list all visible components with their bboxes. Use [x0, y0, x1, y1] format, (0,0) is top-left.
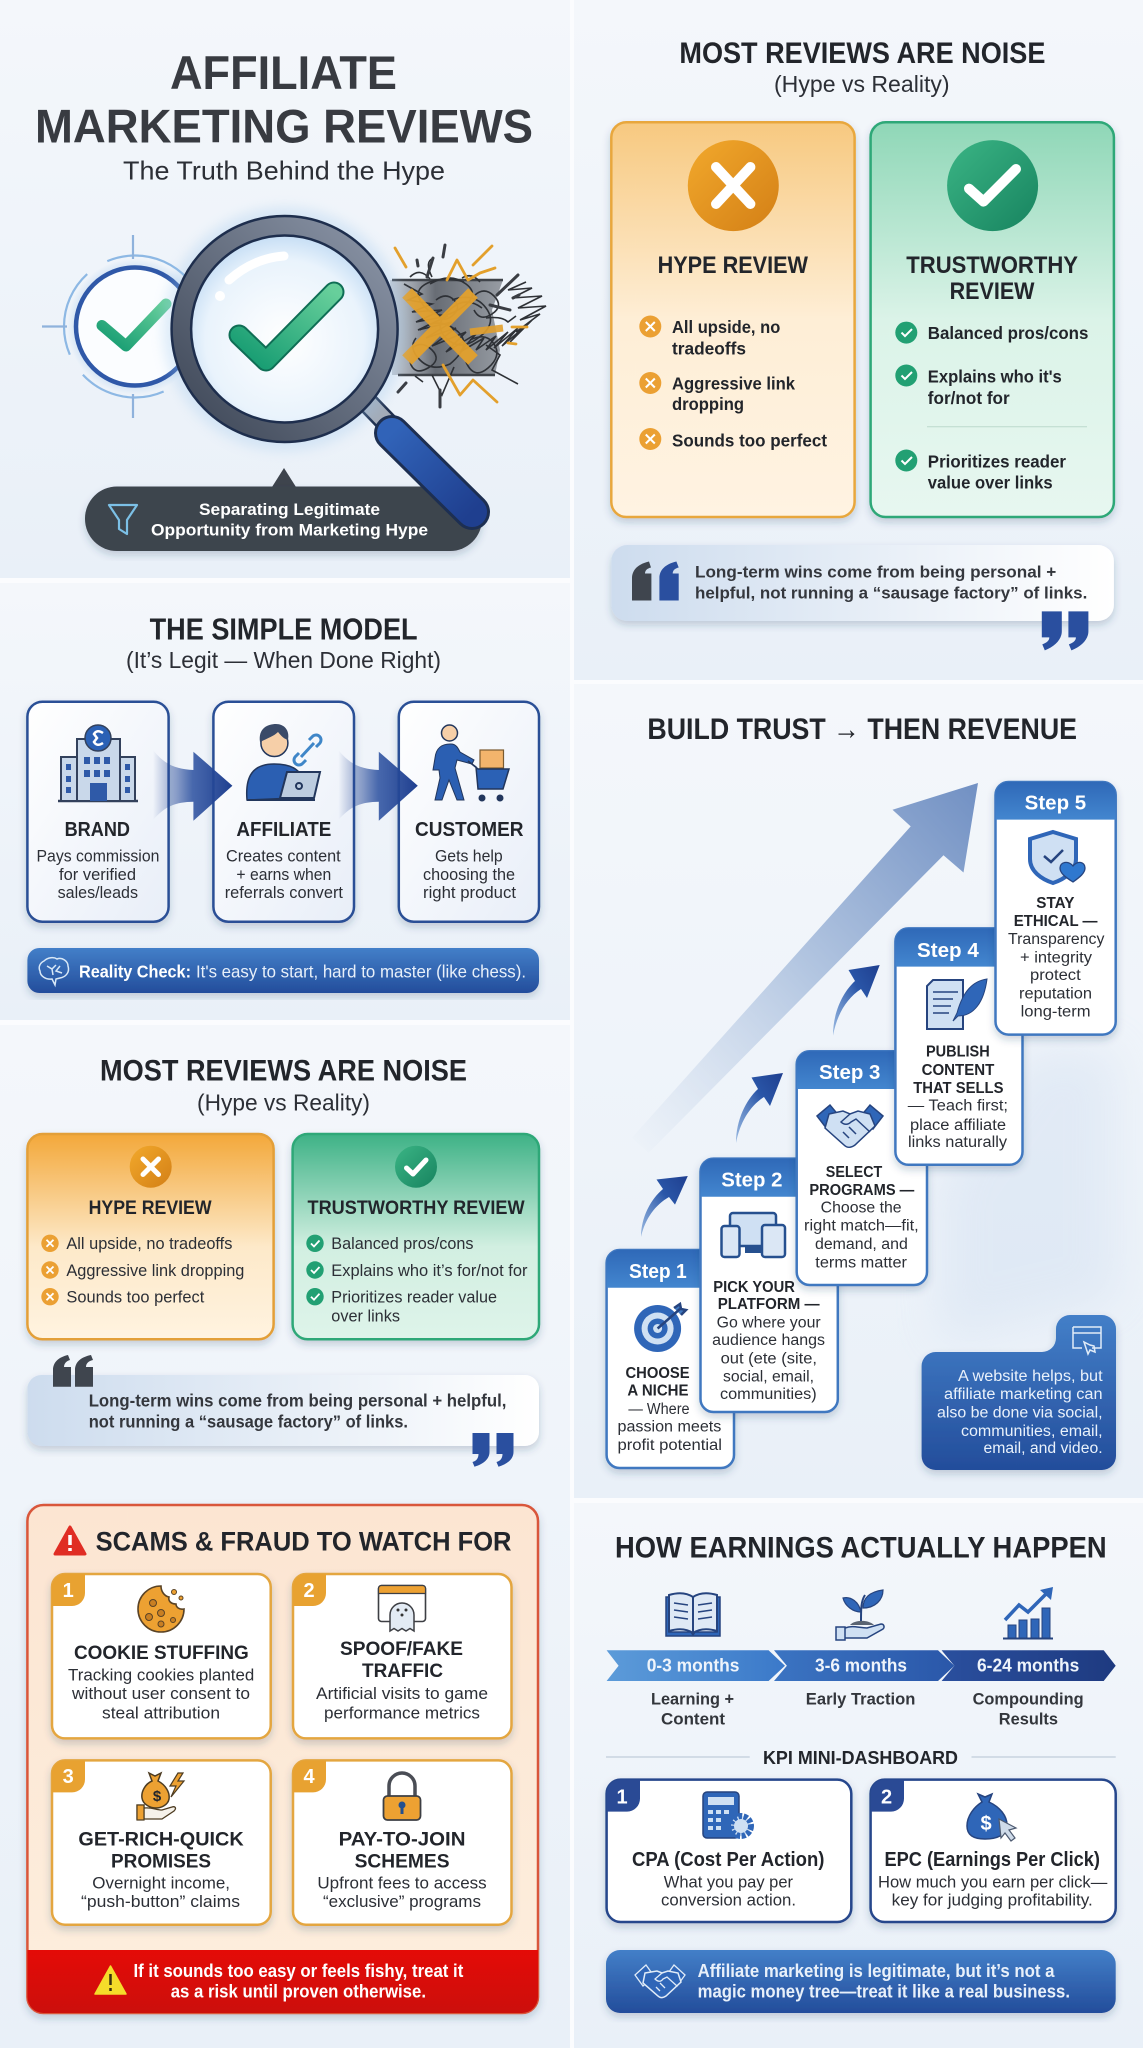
- badge: 1: 1: [616, 1786, 628, 1808]
- step text: place affiliate: [910, 1117, 1006, 1134]
- badge: 1: [52, 1574, 85, 1606]
- subheading: (Hype vs Reality): [197, 1090, 370, 1116]
- label: SCHEMES: [355, 1851, 450, 1873]
- quote text: helpful, not running a “sausage factory” of links.: [695, 583, 1087, 602]
- description: [878, 1873, 1108, 1909]
- step text: THAT SELLS: [913, 1080, 1004, 1097]
- badge: 2: 2: [881, 1786, 892, 1808]
- card: hype review: [611, 122, 855, 517]
- icon: x badge: [130, 1146, 172, 1188]
- card: affiliate: [213, 702, 354, 922]
- step text: SELECT: [826, 1164, 883, 1181]
- description: [68, 1667, 254, 1722]
- description: [661, 1873, 796, 1909]
- timeline captions: Early Traction: [806, 1690, 915, 1708]
- card: pay to join: [293, 1760, 512, 1925]
- description: How much you earn per click—: [878, 1873, 1108, 1891]
- description: sales/leads: [58, 884, 138, 902]
- step text: [712, 1279, 825, 1403]
- label: CPA (Cost Per Action): [632, 1849, 824, 1871]
- icon: growth chart: [1003, 1587, 1053, 1638]
- label: GET-RICH-QUICK: [78, 1828, 244, 1850]
- title: MARKETING REVIEWS: [35, 99, 533, 152]
- icon: money bag and cursor: $: [980, 1813, 992, 1835]
- note text: communities, email,: [961, 1423, 1103, 1440]
- arrow: affiliate to customer: [338, 750, 418, 821]
- chevron: 6-24 months: 6-24 months: [977, 1655, 1079, 1675]
- icon: check badge: [395, 1146, 437, 1188]
- icon: open book: [666, 1593, 720, 1636]
- bullet list: Sounds too perfect: [672, 431, 827, 451]
- arrow: brand to affiliate: [153, 750, 232, 821]
- card: CPA: [607, 1780, 851, 1922]
- panel: build trust then revenue: [574, 684, 1143, 1498]
- description: choosing the: [423, 866, 515, 884]
- bullet list: dropping: [672, 394, 744, 414]
- heading: HOW EARNINGS ACTUALLY HAPPEN: [615, 1532, 1107, 1565]
- bullet list: tradeoffs: [672, 338, 746, 358]
- heading: MOST REVIEWS ARE NOISE: [679, 37, 1045, 70]
- step 5 card: [996, 782, 1116, 1035]
- step text: — Teach first;: [908, 1097, 1008, 1114]
- chevron: 0-3 months: [607, 1650, 785, 1681]
- description: [225, 848, 343, 902]
- bullet list: [41, 1235, 244, 1307]
- quote text: [89, 1391, 506, 1431]
- timeline captions: Content: [661, 1709, 725, 1728]
- description: [317, 1875, 487, 1911]
- heading: SCAMS & FRAUD TO WATCH FOR: [96, 1527, 511, 1557]
- step text: profit potential: [618, 1437, 722, 1454]
- label: COOKIE STUFFING: [74, 1642, 249, 1664]
- icon: person with laptop and link: [247, 724, 321, 800]
- label: REVIEW: [950, 278, 1035, 305]
- bullet list: [306, 1235, 528, 1326]
- card: brand: [27, 702, 169, 922]
- label: [339, 1828, 466, 1873]
- bullet list: Prioritizes reader value: [331, 1289, 497, 1307]
- icon: devices: [722, 1213, 785, 1257]
- bullet list: Aggressive link: [672, 373, 795, 393]
- step text: CHOOSE: [626, 1365, 690, 1382]
- step text: reputation: [1019, 986, 1092, 1002]
- label: PAY-TO-JOIN: [339, 1828, 466, 1850]
- bullet list: [895, 322, 1089, 493]
- badge: 2: [871, 1780, 904, 1812]
- callout: reality check: [27, 948, 539, 993]
- icon: funnel: [109, 505, 137, 534]
- label: HYPE REVIEW: [89, 1197, 212, 1219]
- badge: 1: [607, 1780, 640, 1812]
- icon: customer with cart: [433, 725, 509, 802]
- arrow: step 1 to 2: [641, 1176, 688, 1237]
- step text: social, email,: [723, 1368, 814, 1385]
- subheading: (Hype vs Reality): [774, 71, 950, 97]
- step text: [1008, 895, 1105, 1020]
- card: hype review: [27, 1134, 274, 1339]
- icon: handshake: [817, 1105, 883, 1147]
- icon: calculator and gear: [703, 1792, 751, 1838]
- badge: 1: 1: [63, 1580, 74, 1602]
- description: Upfront fees to access: [317, 1875, 487, 1893]
- description: right product: [423, 884, 516, 902]
- description: referrals convert: [225, 884, 343, 902]
- callout: quote: [611, 545, 1114, 650]
- step text: — Where: [628, 1401, 690, 1418]
- panel: how earnings actually happen: [574, 1503, 1143, 2048]
- step text: long-term: [1021, 1003, 1091, 1020]
- text: Reality Check:: [79, 962, 191, 982]
- footer warning: If it sounds too easy or feels fishy, treat it: [134, 1961, 463, 1981]
- callout: separating legitimate opportunity: Separating Legitimate: [199, 500, 380, 519]
- note text: affiliate marketing can: [944, 1386, 1103, 1403]
- bullet list: value over links: [928, 473, 1053, 493]
- callout: quote: [27, 1355, 539, 1467]
- subtitle: The Truth Behind the Hype: [123, 155, 445, 185]
- description: + earns when: [236, 866, 331, 884]
- arrow: big rising arrow: [632, 783, 978, 1153]
- description: Artificial visits to game: [316, 1685, 488, 1703]
- card: spoof fake traffic: [293, 1574, 512, 1738]
- badge: 3: [52, 1760, 85, 1792]
- timeline chevrons: [607, 1650, 1116, 1681]
- step label: Step 5: [1025, 793, 1086, 815]
- step text: [908, 1044, 1008, 1151]
- label: BRAND: [65, 819, 130, 841]
- icon: document and quill: [927, 979, 987, 1029]
- icon: sprout in hand: [836, 1590, 884, 1640]
- quote text: [695, 563, 1087, 602]
- icon: scribble noise with orange X: [390, 245, 546, 407]
- description: for verified: [59, 866, 136, 884]
- timeline captions: [651, 1690, 1084, 1728]
- description: [36, 848, 159, 902]
- description: Tracking cookies planted: [68, 1667, 254, 1685]
- badge: 2: [293, 1574, 326, 1606]
- step text: PUBLISH: [926, 1044, 990, 1061]
- step text: demand, and: [815, 1236, 908, 1253]
- label: SPOOF/FAKE: [340, 1638, 463, 1660]
- icon: building: [58, 725, 138, 801]
- timeline column icons: [666, 1587, 1053, 1640]
- description: Overnight income,: [92, 1875, 230, 1893]
- icon: check badge: [947, 140, 1038, 231]
- icon: red warning triangle: [55, 1527, 85, 1554]
- KPI subheading: KPI MINI-DASHBOARD: [763, 1747, 958, 1768]
- footer warning: as a risk until proven otherwise.: [171, 1982, 426, 2002]
- bullet list: [639, 316, 827, 451]
- label: TRAFFIC: [362, 1660, 443, 1682]
- bullet list: Prioritizes reader: [928, 452, 1066, 472]
- bullet list: All upside, no tradeoffs: [66, 1235, 232, 1253]
- bullet list: for/not for: [928, 388, 1010, 408]
- icon: cookie: [138, 1586, 184, 1632]
- badge: 4: 4: [303, 1766, 315, 1788]
- description: Gets help: [435, 848, 503, 866]
- bullet list: Explains who it's: [928, 366, 1062, 386]
- description: [316, 1685, 488, 1722]
- card: trustworthy review: [293, 1134, 539, 1339]
- label: AFFILIATE: [236, 819, 331, 841]
- step 2 card: [700, 1159, 838, 1412]
- note text: email, and video.: [984, 1440, 1103, 1457]
- step text: [618, 1365, 722, 1454]
- card: customer: [399, 702, 539, 922]
- card: trustworthy review: [871, 122, 1114, 517]
- note text: also be done via social,: [937, 1404, 1103, 1421]
- bullet list: Explains who it’s for/not for: [331, 1262, 528, 1280]
- step text: ETHICAL —: [1014, 913, 1098, 930]
- step text: protect: [1030, 967, 1081, 984]
- step text: links naturally: [908, 1134, 1007, 1151]
- timeline captions: Learning +: [651, 1690, 734, 1708]
- step text: A NICHE: [627, 1382, 688, 1400]
- icon: browser click: [1073, 1327, 1101, 1354]
- timeline captions: Compounding: [973, 1690, 1084, 1708]
- bullet list: Sounds too perfect: [66, 1289, 205, 1307]
- subheading: (It’s Legit — When Done Right): [126, 647, 441, 673]
- bullet list: Aggressive link dropping: [66, 1262, 244, 1280]
- label: TRUSTWORTHY: [906, 252, 1078, 279]
- description: steal attribution: [102, 1704, 220, 1722]
- callout: website note: [922, 1315, 1116, 1470]
- note text: A website helps, but: [958, 1368, 1103, 1385]
- icon: magnifying glass: [163, 207, 472, 512]
- card: cookie stuffing: [52, 1574, 271, 1738]
- chevron: 6-24 months: [942, 1650, 1116, 1681]
- icon: money bag and lightning: $: [153, 1788, 162, 1805]
- icon: target: [634, 1304, 686, 1352]
- takeaway text: magic money tree—treat it like a real business.: [698, 1982, 1070, 2002]
- icon: x badge: [688, 140, 779, 231]
- step text: audience hangs: [712, 1332, 825, 1349]
- icon: opening quote: [53, 1355, 93, 1387]
- badge: 4: [293, 1760, 326, 1792]
- callout: takeaway bar: [606, 1950, 1116, 2013]
- card: get rich quick: [52, 1760, 271, 1925]
- title: AFFILIATE: [170, 46, 397, 99]
- step text: terms matter: [815, 1254, 907, 1271]
- callout: separating legitimate opportunity: Opportunity from Marketing Hype: [151, 521, 428, 540]
- chevron: 3-6 months: 3-6 months: [815, 1655, 907, 1675]
- icon: brain: [39, 958, 69, 985]
- step text: STAY: [1036, 895, 1075, 912]
- panel: hero title and magnifier: [0, 0, 570, 578]
- bullet list: All upside, no: [672, 317, 780, 337]
- chevron: 0-3 months: 0-3 months: [647, 1655, 740, 1675]
- step 3 card: [797, 1051, 927, 1285]
- callout: separating legitimate opportunity: [85, 468, 482, 551]
- quote text: Long-term wins come from being personal + helpful,: [89, 1391, 506, 1411]
- label: EPC (Earnings Per Click): [884, 1849, 1100, 1871]
- icon: shield and heart: [1030, 832, 1085, 883]
- label: [340, 1638, 463, 1682]
- icon: ghost in browser: [378, 1586, 426, 1631]
- step text: + integrity: [1020, 949, 1092, 966]
- icon: small target check: [42, 235, 206, 418]
- description: key for judging profitability.: [892, 1891, 1093, 1909]
- step text: out (ete (site,: [721, 1351, 817, 1368]
- text: It's easy to start, hard to master (like chess).: [196, 962, 526, 982]
- label: [906, 252, 1078, 305]
- step text: [804, 1164, 919, 1271]
- step text: passion meets: [618, 1419, 722, 1436]
- description: conversion action.: [661, 1891, 796, 1909]
- badge: 2: 2: [303, 1580, 315, 1602]
- title: [35, 46, 533, 152]
- timeline captions: Results: [999, 1709, 1058, 1728]
- icon: money bag and cursor: [967, 1794, 1016, 1841]
- icon: yellow warning triangle: [95, 1966, 126, 1994]
- bullet list: Balanced pros/cons: [928, 323, 1089, 343]
- note text: [937, 1368, 1103, 1457]
- step label: Step 2: [721, 1169, 782, 1191]
- label: PROMISES: [111, 1851, 211, 1873]
- footer warning: [27, 1950, 538, 2013]
- icon: closing quote: [472, 1433, 514, 1467]
- step 1 card: [607, 1250, 734, 1468]
- description: performance metrics: [324, 1704, 480, 1722]
- step label: Step 1: [629, 1261, 687, 1283]
- step text: PLATFORM —: [718, 1296, 820, 1313]
- step text: Transparency: [1008, 931, 1105, 948]
- panel: most reviews are noise (left): [0, 1025, 570, 2048]
- quote text: Long-term wins come from being personal +: [695, 563, 1056, 582]
- arrow: step 2 to 3: [736, 1073, 783, 1143]
- description: What you pay per: [664, 1873, 793, 1891]
- description: Creates content: [226, 848, 341, 866]
- arrow: step 3 to 4: [833, 965, 880, 1036]
- step text: Choose the: [821, 1199, 902, 1216]
- step label: Step 4: [917, 940, 980, 962]
- step text: Go where your: [717, 1314, 821, 1332]
- step text: PICK YOUR: [713, 1279, 795, 1296]
- step text: right match—fit,: [804, 1218, 919, 1235]
- icon: handshake: [635, 1965, 685, 1998]
- step text: CONTENT: [922, 1062, 995, 1079]
- quote text: not running a “sausage factory” of links.: [89, 1411, 408, 1431]
- panel: most reviews are noise (right): [574, 0, 1143, 680]
- icon: money bag and lightning: [137, 1773, 184, 1820]
- takeaway text: Affiliate marketing is legitimate, but it’s not a: [698, 1961, 1055, 1981]
- card: EPC: [871, 1780, 1116, 1922]
- description: [423, 848, 516, 902]
- takeaway text: [698, 1961, 1070, 2002]
- description: without user consent to: [71, 1685, 250, 1703]
- bullet list: over links: [331, 1308, 400, 1326]
- description: “push-button” claims: [81, 1893, 240, 1911]
- heading: BUILD TRUST → THEN REVENUE: [647, 713, 1077, 746]
- description: Pays commission: [36, 848, 159, 866]
- panel: scams and fraud: [27, 1505, 538, 2013]
- description: [81, 1875, 240, 1911]
- icon: opening quote: [632, 562, 679, 600]
- icon: closing quote: [1042, 611, 1088, 650]
- heading: MOST REVIEWS ARE NOISE: [100, 1055, 467, 1088]
- panel: the simple model: [0, 583, 570, 1020]
- badge: 3: 3: [63, 1766, 74, 1788]
- label: HYPE REVIEW: [658, 252, 808, 279]
- step 4 card: [895, 928, 1022, 1165]
- heading: THE SIMPLE MODEL: [150, 611, 418, 646]
- label: CUSTOMER: [415, 819, 524, 841]
- icon: padlock: [384, 1773, 420, 1820]
- step label: Step 3: [819, 1062, 880, 1084]
- description: “exclusive” programs: [323, 1893, 481, 1911]
- chevron: 3-6 months: [774, 1650, 954, 1681]
- label: [78, 1828, 244, 1873]
- bullet list: Balanced pros/cons: [331, 1235, 474, 1253]
- step text: PROGRAMS —: [809, 1182, 915, 1199]
- step text: communities): [720, 1386, 817, 1403]
- label: TRUSTWORTHY REVIEW: [308, 1197, 525, 1219]
